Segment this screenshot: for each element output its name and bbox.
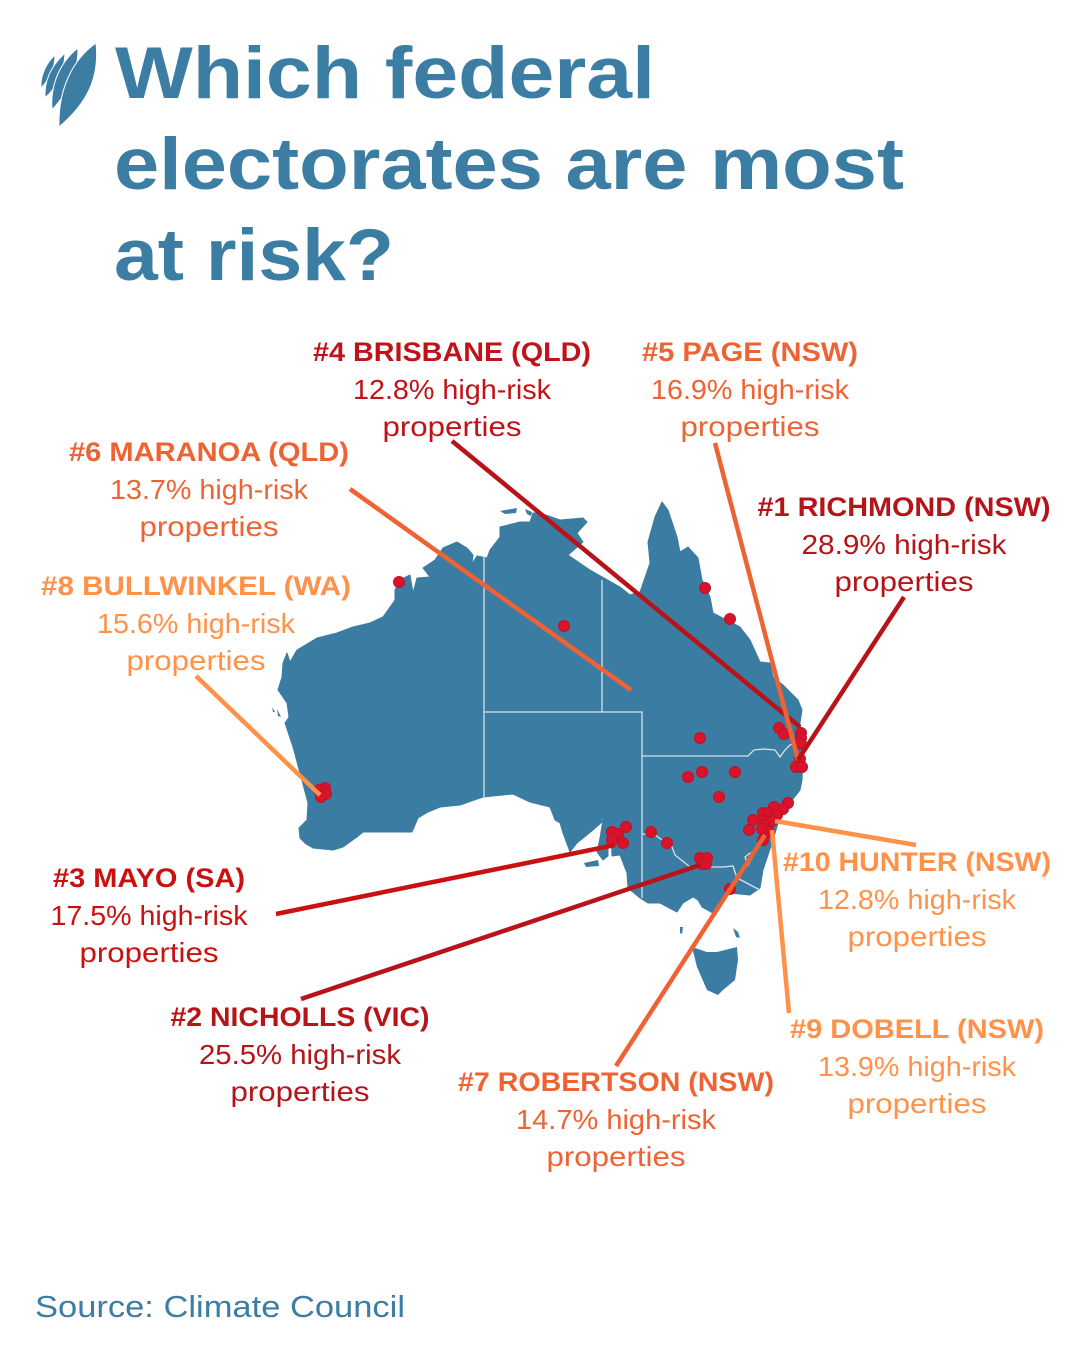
title: at risk? [114,215,394,296]
icon: SBS logo [41,43,97,127]
label: #5 Page [642,337,858,442]
label: #1 Richmond: #1 RICHMOND (NSW) [758,492,1050,522]
label: #6 Maranoa: 13.7% high-risk [110,474,309,505]
label: #5 Page: properties [680,411,820,442]
label: #8 Bullwinkel: #8 BULLWINKEL (WA) [41,571,351,601]
label: #4 Brisbane: 12.8% high-risk [353,374,552,405]
label: #1 Richmond: properties [834,566,974,597]
label: #2 Nicholls: #2 NICHOLLS (VIC) [170,1002,430,1032]
title [114,33,904,296]
label: #4 Brisbane: properties [382,411,522,442]
label: #7 Robertson: 14.7% high-risk [516,1104,717,1135]
label: #6 Maranoa: #6 MARANOA (QLD) [69,437,349,467]
label: #8 Bullwinkel [41,571,351,676]
label: #7 Robertson: properties [546,1141,686,1172]
label: #1 Richmond [758,492,1050,597]
label: #3 Mayo: 17.5% high-risk [50,900,249,931]
label: #10 Hunter: #10 HUNTER (NSW) [783,847,1051,877]
label: #2 Nicholls: properties [230,1076,370,1107]
title: electorates are most [114,124,904,205]
label: #10 Hunter: 12.8% high-risk [818,884,1017,915]
label: #9 Dobell: properties [848,1088,986,1119]
source: Source: Climate Council [35,1289,405,1324]
label: #8 Bullwinkel: 15.6% high-risk [97,608,296,639]
label: #10 Hunter: properties [848,921,986,952]
label: #2 Nicholls [170,1002,430,1107]
label: #4 Brisbane: #4 BRISBANE (QLD) [313,337,591,367]
risk dots [314,576,808,894]
label: #5 Page: 16.9% high-risk [651,374,850,405]
label: #4 Brisbane [313,337,591,442]
label: #3 Mayo: properties [80,937,218,968]
label: #2 Nicholls: 25.5% high-risk [199,1039,402,1070]
label: #3 Mayo [50,863,249,968]
label: #6 Maranoa [69,437,349,542]
title: Which federal [115,33,655,114]
state borders [484,556,800,898]
Tasmania [692,947,738,995]
label: #5 Page: #5 PAGE (NSW) [642,337,858,367]
label: #3 Mayo: #3 MAYO (SA) [53,863,245,893]
label: #9 Dobell [790,1014,1044,1119]
label: #9 Dobell: #9 DOBELL (NSW) [790,1014,1044,1044]
label: #1 Richmond: 28.9% high-risk [802,529,1008,560]
label: #9 Dobell: 13.9% high-risk [818,1051,1017,1082]
label: #6 Maranoa: properties [140,511,278,542]
map of Australia [272,502,803,995]
label: #7 Robertson: #7 ROBERTSON (NSW) [458,1067,774,1097]
islands [272,508,740,938]
label: #10 Hunter [783,847,1051,952]
label: #8 Bullwinkel: properties [126,645,266,676]
label: #7 Robertson [458,1067,774,1172]
leader lines [196,441,916,1066]
mainland [278,502,803,913]
